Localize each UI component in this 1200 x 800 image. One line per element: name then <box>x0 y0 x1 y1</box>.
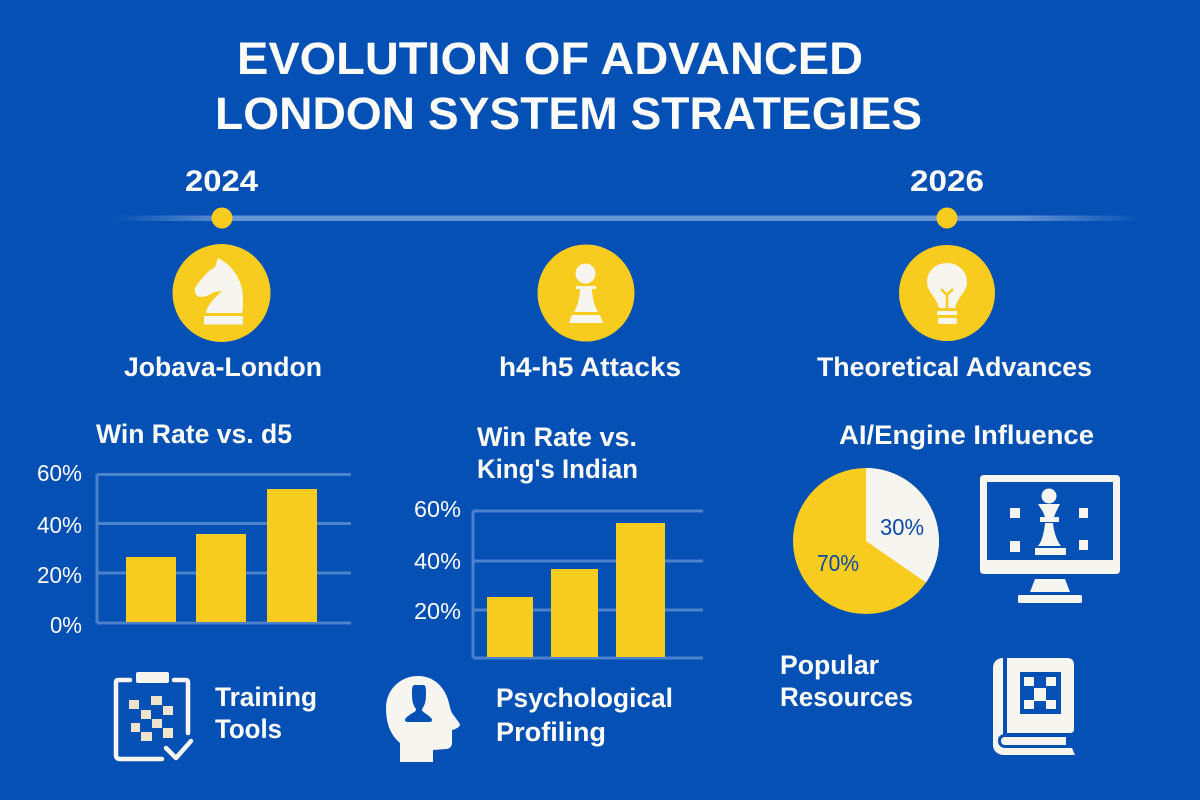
icon: light bulb <box>899 245 995 341</box>
bar chart: win rate vs d5: 40% <box>37 512 82 538</box>
bar chart: win rate vs d5: 0% <box>50 612 82 638</box>
label: Training Tools: Training <box>215 682 317 712</box>
bar chart: win rate vs d5: 60% <box>37 460 82 486</box>
bar chart: win rate vs King's Indian: 40% <box>414 548 461 574</box>
label: Training Tools: Tools <box>215 714 282 744</box>
bar chart: win rate vs d5: 20% <box>37 562 82 588</box>
pie chart: AI influence: 70% <box>817 550 859 576</box>
icon: knight <box>172 244 270 342</box>
icon: monitor with chess king <box>980 475 1120 603</box>
heading: AI/Engine Influence: AI/Engine Influence <box>839 420 1094 450</box>
label: Jobava-London: Jobava-London <box>124 352 322 382</box>
label: Popular Resources <box>780 650 913 712</box>
pie chart: AI influence <box>793 468 939 614</box>
icon: head with profile <box>386 676 460 762</box>
timeline <box>112 165 1142 228</box>
heading: Win Rate vs. King's Indian: Win Rate vs. <box>477 422 637 452</box>
bar chart: win rate vs King's Indian: 20% <box>414 598 461 624</box>
icon: chess book <box>993 658 1075 755</box>
year 2026 marker <box>910 165 984 228</box>
bar chart: win rate vs King's Indian <box>414 496 703 658</box>
title: LONDON SYSTEM STRATEGIES <box>215 88 922 139</box>
label: h4-h5 Attacks: h4-h5 Attacks <box>499 352 681 382</box>
icon: training clipboard <box>116 672 191 759</box>
title: EVOLUTION OF ADVANCED <box>237 33 863 84</box>
heading: Win Rate vs. King's Indian <box>477 422 638 484</box>
bar chart: win rate vs King's Indian: 60% <box>414 496 461 522</box>
label: Theoretical Advances: Theoretical Advances <box>817 352 1092 382</box>
title <box>215 33 922 139</box>
year 2026 marker: 2026 <box>910 165 984 198</box>
label: Popular Resources: Popular <box>780 650 879 680</box>
label: Psychological Profiling <box>496 683 673 747</box>
heading: Win Rate vs. d5: Win Rate vs. d5 <box>96 419 292 449</box>
label: Psychological Profiling: Psychological <box>496 683 673 713</box>
pie chart: AI influence: 30% <box>880 514 924 540</box>
heading: Win Rate vs. King's Indian: King's Indian <box>477 454 638 484</box>
icon: pawn <box>538 244 634 342</box>
year 2024 marker: 2024 <box>185 165 258 198</box>
label: Psychological Profiling: Profiling <box>496 717 606 747</box>
label: Training Tools <box>215 682 317 744</box>
bar chart: win rate vs d5 <box>37 460 351 638</box>
year 2024 marker <box>185 165 258 228</box>
label: Popular Resources: Resources <box>780 682 913 712</box>
